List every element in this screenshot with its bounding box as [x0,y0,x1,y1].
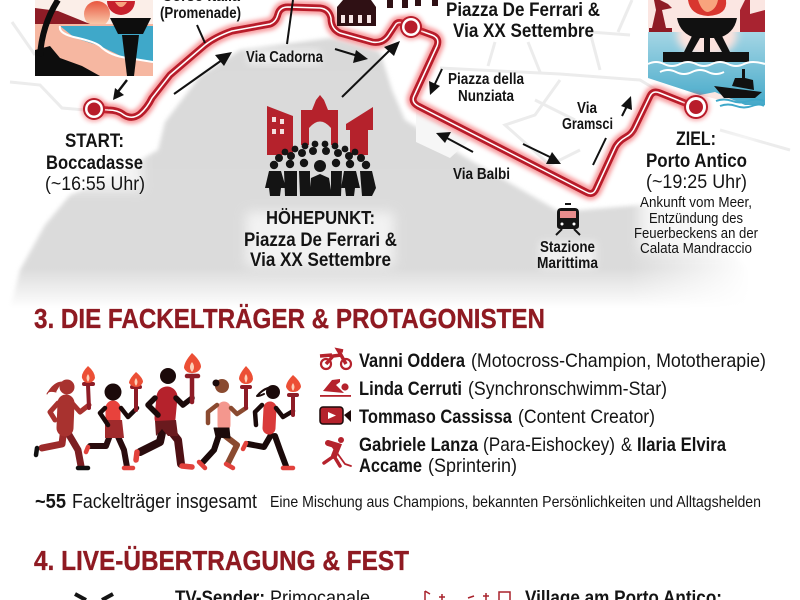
row: Linda Cerruti: (Synchronschwimm-Star) [468,378,667,400]
row: Tommaso Cassissa: (Content Creator) [518,406,655,428]
label: Via Cadorna: Via Cadorna [246,49,323,66]
street network [10,0,790,165]
runner 1 [36,366,95,468]
label: highlight: Via XX Settembre [250,249,391,271]
label: Piazza De Ferrari top: Via XX Settembre [453,20,594,42]
label: start: START: [65,130,124,152]
highlight marker [398,14,424,40]
label: highlight: Piazza De Ferrari & [244,229,397,251]
icon: motorbike [320,350,351,369]
label: Piazza della Nunziata: Piazza della [448,71,524,88]
label: Stazione Marittima: Marittima [537,255,598,272]
row: Gabriele Lanza and Ilaria Elvira Accame [359,434,726,477]
route line [94,7,695,193]
row: Vanni Oddera [359,350,766,372]
label: Piazza De Ferrari top [446,0,600,42]
label: finish [634,128,758,257]
row: Gabriele Lanza and Ilaria Elvira Accame: & [621,434,632,456]
label: Via Balbi: Via Balbi [453,166,510,183]
row: Tommaso Cassissa [359,406,655,428]
finish marker [682,93,710,121]
row: Vanni Oddera: (Motocross-Champion, Mototherapie) [471,350,766,372]
icon: crowd at Piazza De Ferrari [265,95,376,196]
label: Piazza della Nunziata [448,71,524,105]
label: Corso Italia: (Promenade) [160,5,241,22]
stat: torchbearer count: Fackelträger insgesamt [72,491,257,513]
heading: section 4: 4. LIVE-ÜBERTRAGUNG & FEST [34,545,409,576]
label: finish: Calata Mandraccio [640,240,752,257]
row: Gabriele Lanza and Ilaria Elvira Accame: Accame [359,455,422,477]
label: finish: Ankunft vom Meer, [640,194,752,211]
label: Via Gramsci [562,100,613,133]
text: TV broadcaster [175,587,370,600]
label: Via Gramsci: Via [577,100,597,117]
row: Linda Cerruti: Linda Cerruti [359,378,462,400]
row: Tommaso Cassissa: Tommaso Cassissa [359,406,512,428]
label: highlight: HÖHEPUNKT: [266,208,375,228]
row: Gabriele Lanza and Ilaria Elvira Accame: Gabriele Lanza [359,434,478,456]
icon: para ice hockey [324,437,351,466]
label: highlight [244,208,397,271]
icon: Boccadasse beach and torch [35,0,153,76]
icon: Porto Antico brazier and boat [648,0,765,108]
label: Corso Italia [160,0,241,22]
runner 3 [136,353,201,467]
label: finish: Feuerbeckens an der [634,225,758,242]
icon: train [556,204,580,235]
runner 2 [86,372,143,468]
label: Piazza della Nunziata: Nunziata [458,88,514,105]
icon: video camera [320,407,351,424]
label: start: Boccadasse [46,152,143,174]
row: Gabriele Lanza and Ilaria Elvira Accame: (Sprinterin) [428,455,517,477]
sea area [5,38,800,330]
label: Stazione Marittima: Stazione [540,239,595,256]
row: Vanni Oddera: Vanni Oddera [359,350,465,372]
label: Via Gramsci: Gramsci [562,116,613,133]
arrows along the route [113,0,632,165]
label: finish: Entzündung des [649,210,743,227]
label: finish: Porto Antico [646,150,747,172]
label: finish: ZIEL: [676,128,716,150]
icon: boat [714,69,762,98]
start marker [81,96,107,122]
label: Stazione Marittima [537,239,598,272]
heading: section 3: 3. DIE FACKELTRÄGER & PROTAGONISTEN [34,303,545,334]
label: start: (~16:55 Uhr) [45,173,145,195]
row: Gabriele Lanza and Ilaria Elvira Accame: (Para-Eishockey) [483,434,615,456]
runner 5 [243,375,301,468]
label: start [45,130,145,195]
icon: TV antenna [75,594,113,600]
protagonist list [320,350,766,477]
illustration: torch runners [36,353,301,468]
icon: swimmer [320,379,351,397]
stat: torchbearer count: ~55 [35,491,66,513]
row: Linda Cerruti [359,378,667,400]
icon: Piazza De Ferrari landmark top [337,0,438,26]
icon: music notes [425,591,510,600]
label: finish: (~19:25 Uhr) [646,171,747,193]
runner 4 [199,366,253,468]
row: Gabriele Lanza and Ilaria Elvira Accame: Ilaria Elvira [637,434,726,456]
